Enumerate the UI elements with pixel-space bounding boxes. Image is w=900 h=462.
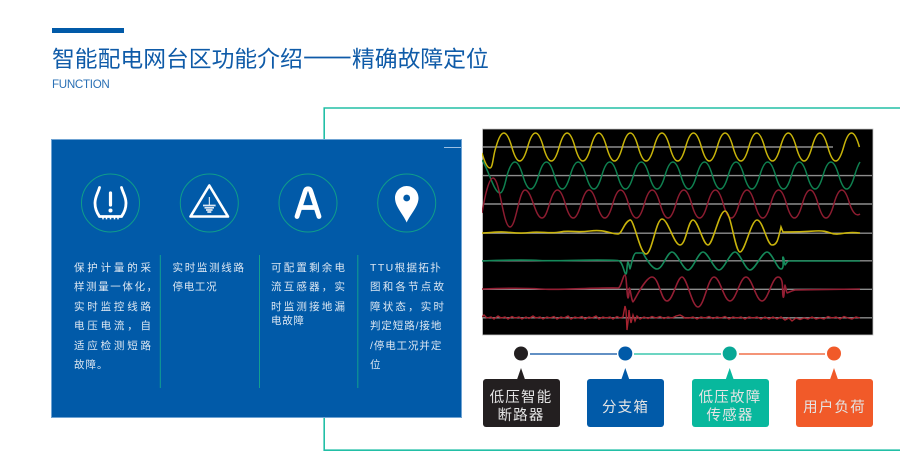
- top accent bar: [52, 28, 124, 32]
- text block: column 4: /停电工况并定: [370, 340, 442, 352]
- text block: column 3: 电故障: [271, 315, 305, 327]
- label: user load: [796, 379, 873, 427]
- text block: column 3: [271, 262, 347, 327]
- waveform: green phase voltage: [482, 160, 860, 193]
- text block: column 4: 判定短路/接地: [370, 320, 442, 332]
- timeline: device connections: [514, 346, 841, 379]
- label: user load: 用户负荷: [803, 400, 866, 416]
- text block: column 4: TTU根据拓扑: [370, 262, 442, 274]
- panel: features: [51, 139, 462, 418]
- title: 智能配电网台区功能介绍——精确故障定位: [52, 39, 489, 75]
- text block: column 4: 障状态，实时: [370, 301, 446, 313]
- label: low-voltage smart breaker: [482, 379, 560, 427]
- label: low-voltage smart breaker: 低压智能: [490, 390, 552, 406]
- label: low-voltage smart breaker: 断路器: [497, 408, 545, 424]
- label: low-voltage fault sensor: 低压故障: [699, 390, 761, 406]
- text block: column 4: [370, 262, 446, 371]
- label: low-voltage fault sensor: [692, 379, 768, 427]
- text block: column 1: 样测量一体化，: [74, 281, 159, 293]
- icon: letter A: [278, 174, 338, 232]
- icon: location pin: [377, 174, 436, 232]
- text block: column 3: 可配置剩余电: [271, 262, 347, 274]
- text block: column 4: 图和各节点故: [370, 281, 446, 293]
- text block: column 3: 流互感器，实: [271, 281, 347, 293]
- text block: column 1: 故障。: [74, 359, 108, 371]
- icon: tyre pressure warning: [81, 174, 140, 232]
- text block: column 3: 时监测接地漏: [271, 301, 347, 313]
- text block: column 2: 停电工况: [172, 281, 217, 293]
- waveform: red residual current: [482, 306, 860, 330]
- waveform: yellow fault current: [482, 211, 860, 254]
- text block: column 1: 实时监控线路: [74, 301, 154, 313]
- text block: column 4: 位: [370, 359, 380, 371]
- waveform: red fault current: [482, 275, 860, 307]
- text block: column 1: 适应检测短路: [74, 340, 154, 352]
- chart: fault waveforms: [482, 128, 874, 336]
- small corner tick: [444, 147, 461, 148]
- label: branch box: [587, 379, 664, 427]
- waveform: red phase voltage: [482, 178, 860, 227]
- subtitle: FUNCTION: FUNCTION: [52, 78, 110, 91]
- text block: column 1: 保护计量的采: [74, 262, 154, 274]
- icon: ground warning triangle: [180, 174, 239, 232]
- label: branch box: 分支箱: [602, 400, 649, 416]
- text block: column 2: 实时监测线路: [172, 262, 246, 274]
- label: low-voltage fault sensor: 传感器: [706, 408, 754, 424]
- waveform: yellow phase voltage: [482, 133, 859, 168]
- waveform: green fault current: [482, 252, 860, 274]
- text block: column 1: [74, 262, 159, 371]
- text block: column 1: 电压电流，自: [74, 320, 154, 332]
- text block: column 2: [172, 262, 246, 293]
